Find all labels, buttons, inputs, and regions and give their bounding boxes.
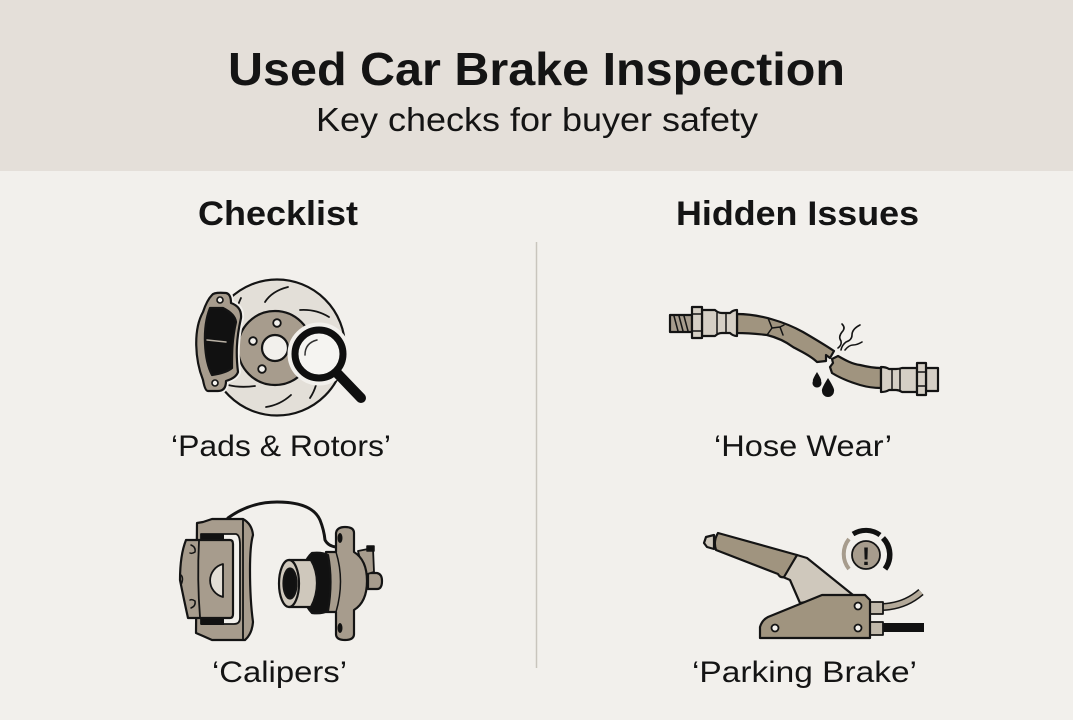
icon: parking brake with warning gauge xyxy=(704,530,924,638)
brake pad xyxy=(196,293,241,391)
magnifier xyxy=(289,324,349,384)
right fitting xyxy=(881,367,917,392)
icon: parking brake with warning gauge: ! xyxy=(862,543,870,571)
mount body xyxy=(368,573,382,589)
label: parking brake: ‘Parking Brake’ xyxy=(692,656,917,689)
label: pads and rotors: ‘Pads & Rotors’ xyxy=(171,430,391,463)
thread xyxy=(670,315,692,332)
lever neck xyxy=(783,555,853,603)
header band xyxy=(0,0,1073,171)
hub xyxy=(238,311,312,385)
fluid drops xyxy=(812,372,822,388)
grip xyxy=(715,533,797,577)
heading: hidden issues: Hidden Issues xyxy=(676,195,919,233)
subtitle: Key checks for buyer safety xyxy=(316,101,759,138)
left fitting xyxy=(702,310,737,336)
heading: checklist: Checklist xyxy=(198,195,358,233)
caliper bracket xyxy=(196,519,253,640)
right hose section xyxy=(830,356,881,388)
left hose section xyxy=(737,314,834,362)
base xyxy=(760,595,870,638)
warning gauge xyxy=(852,541,880,569)
label: calipers: ‘Calipers’ xyxy=(212,656,347,689)
cables xyxy=(883,592,921,607)
fumes xyxy=(838,324,862,350)
label: hose wear: ‘Hose Wear’ xyxy=(714,430,892,463)
icon: worn hose xyxy=(670,307,938,397)
caliper pad xyxy=(180,540,233,618)
title: Used Car Brake Inspection xyxy=(228,43,845,95)
black seal band xyxy=(302,553,330,613)
brake line xyxy=(228,502,336,547)
icon: pads and rotors with magnifier xyxy=(196,280,361,416)
piston xyxy=(289,560,317,607)
rotor disc xyxy=(209,280,345,416)
icon: calipers xyxy=(180,502,382,640)
